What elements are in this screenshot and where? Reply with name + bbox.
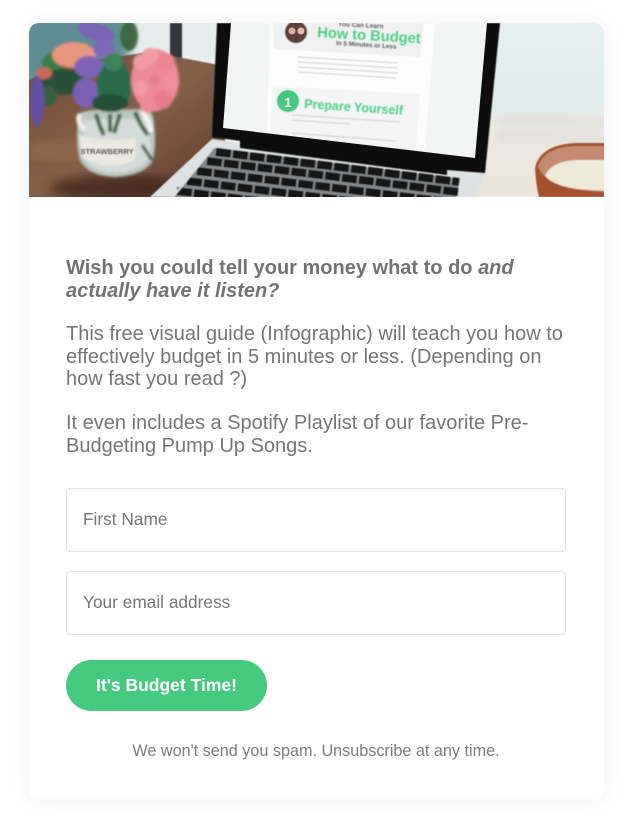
purple flowers [75,18,117,46]
keyboard [172,147,460,221]
hero photo: laptop on a table with flowers and cup [29,23,604,197]
jar [77,109,155,177]
screen [223,23,487,158]
input: email address [66,571,566,635]
authors avatar [285,21,307,43]
jar label text: STRAWBERRY [80,147,134,156]
icon: flower jar [30,18,179,177]
input: email address: Your email address [83,592,230,612]
green centre [97,60,131,112]
intro paragraph: how fast you read ?) [66,368,247,390]
input: first name: First Name [83,509,168,529]
playlist paragraph: Budgeting Pump Up Songs. [66,434,313,456]
pink carnation [131,49,179,111]
infographic page on screen [267,23,435,148]
intro paragraph [66,323,563,390]
intro paragraph: effectively budget in 5 minutes or less. (Depending on [66,346,541,368]
screen heading: In 5 Minutes or Less [336,40,397,51]
input: first name [66,488,566,552]
screen bezel [212,23,500,175]
coral flower [52,42,96,68]
step badge [277,90,299,112]
heading: actually have it listen? [66,280,279,302]
photo background [20,15,220,95]
footer note: We won't send you spam. Unsubscribe at any time. [132,742,500,760]
right background [470,20,610,200]
laptop base [150,139,484,197]
intro paragraph: This free visual guide (Infographic) will teach you how to [66,323,563,345]
button: submit: It's Budget Time! [96,675,237,695]
step heading: Prepare Yourself [304,97,404,118]
heading [66,257,514,302]
screen heading: How to Budget [317,25,421,47]
wooden table [20,52,225,200]
heading: Wish you could tell your money what to do and [66,257,514,279]
icon: laptop: 1 [284,95,292,110]
playlist paragraph [66,412,528,456]
step panel [270,86,420,148]
header panel [273,23,424,57]
playlist paragraph: It even includes a Spotify Playlist of our favorite Pre- [66,412,528,434]
icon: laptop [150,21,500,221]
icon: coffee cup [535,143,606,197]
screen body lines [292,57,400,141]
button: submit [66,660,267,711]
greenery [120,21,138,51]
